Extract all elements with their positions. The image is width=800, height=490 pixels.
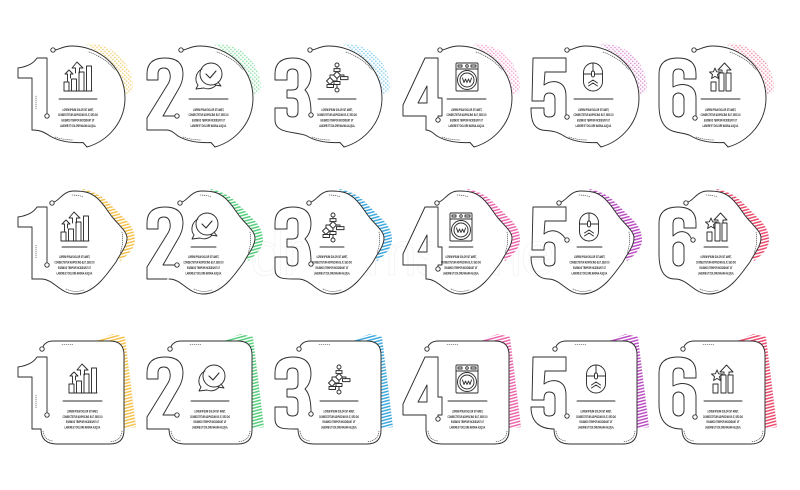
text block: LABORE ET DOLORE MAGNA ALIQUA. — [192, 426, 228, 430]
text block: LABORE ET DOLORE MAGNA ALIQUA. — [64, 426, 100, 430]
text block — [703, 409, 743, 430]
rounded panel outline — [553, 341, 637, 444]
text block: LABORE ET DOLORE MAGNA ALIQUA. — [702, 124, 738, 128]
watermark: dreamstime — [250, 220, 555, 289]
divider — [704, 246, 728, 248]
panel: row 2 step 6 — [659, 189, 769, 294]
text block: LABORE ET DOLORE MAGNA ALIQUA. — [190, 124, 226, 128]
panel: row 3 step 6 — [659, 334, 777, 444]
text block — [448, 409, 488, 430]
text block: LOREM IPSUM DOLOR SIT AMET, — [324, 409, 355, 413]
text block: CONSECTETUR ADIPISCING ELIT, SED DO — [317, 113, 357, 117]
panel: row 1 step 6 — [659, 44, 774, 147]
text block — [190, 409, 230, 430]
icon: growth chart — [69, 364, 97, 393]
text block: EIUSMOD TEMPOR INCIDIDUNT UT — [62, 118, 95, 122]
text block: CONSECTETUR ADIPISCING ELIT, SED DO — [188, 113, 229, 117]
divider — [191, 400, 229, 402]
text block: CONSECTETUR ADIPISCING ELIT, SED DO — [58, 113, 98, 117]
numeral 4 — [403, 58, 442, 130]
text block: CONSECTETUR ADIPISCING ELIT, SED DO — [570, 260, 610, 264]
connector — [32, 278, 41, 280]
hatched accent — [350, 334, 393, 429]
text block: CONSECTETUR ADIPISCING ELIT, SED DO — [703, 415, 743, 419]
hatched accent — [339, 189, 392, 261]
text block: LOREM IPSUM DOLOR SIT AMET, — [451, 108, 482, 112]
text block — [319, 409, 359, 430]
text block: EIUSMOD TEMPOR INCIDIDUNT UT — [451, 420, 484, 424]
rounded panel outline — [297, 341, 381, 444]
text block: CONSECTETUR ADIPISCING ELIT, SED DO — [190, 415, 230, 419]
text block: LOREM IPSUM DOLOR SIT AMET, — [574, 255, 605, 259]
icon: computer mouse — [584, 63, 602, 91]
connector — [167, 428, 169, 430]
text block: LOREM IPSUM DOLOR SIT AMET, — [59, 255, 90, 259]
rounded panel outline — [40, 341, 124, 444]
panel: row 3 step 2 — [147, 334, 264, 444]
divider — [318, 98, 356, 100]
text block — [696, 255, 736, 276]
text block: LABORE ET DOLORE MAGNA ALIQUA. — [705, 426, 741, 430]
text block: CONSECTETUR ADIPISCING ELIT, SED DO — [312, 260, 352, 264]
blob panel outline — [169, 191, 255, 294]
panel: row 3 step 4 — [403, 334, 521, 444]
hatched accent — [210, 189, 263, 261]
text block: LOREM IPSUM DOLOR SIT AMET, — [62, 108, 94, 112]
text block: EIUSMOD TEMPOR INCIDIDUNT UT — [706, 420, 740, 424]
halftone accent — [599, 44, 647, 95]
text block: CONSECTETUR ADIPISCING ELIT, SED DO — [441, 260, 481, 264]
blob panel outline — [41, 191, 127, 294]
text block: LABORE ET DOLORE MAGNA ALIQUA. — [186, 272, 222, 276]
icon: washing machine — [450, 213, 472, 241]
text block: LABORE ET DOLORE MAGNA ALIQUA. — [321, 426, 357, 430]
numeral 4 — [403, 357, 442, 429]
connector — [275, 269, 298, 279]
connector — [659, 404, 682, 429]
speech panel outline — [178, 46, 253, 147]
divider — [574, 98, 613, 100]
text block: CONSECTETUR ADIPISCING ELIT, SED DO — [696, 260, 736, 264]
text block — [441, 255, 481, 276]
panel: row 1 step 2 — [147, 44, 261, 147]
panel: row 2 step 4 — [403, 189, 520, 294]
text block: LABORE ET DOLORE MAGNA ALIQUA. — [314, 272, 350, 276]
blob panel outline — [426, 191, 512, 294]
rounded panel outline — [681, 341, 765, 444]
text block: EIUSMOD TEMPOR INCIDIDUNT UT — [444, 266, 478, 270]
connector — [32, 428, 41, 430]
text block: LABORE ET DOLORE MAGNA ALIQUA. — [698, 272, 734, 276]
speech panel outline — [564, 46, 639, 147]
divider — [577, 400, 615, 402]
halftone accent — [726, 44, 774, 95]
icon: washing machine — [456, 365, 478, 393]
panel: row 1 step 3 — [275, 44, 390, 147]
text block — [312, 255, 352, 276]
icon: star and bars — [712, 365, 733, 393]
text block: EIUSMOD TEMPOR INCIDIDUNT UT — [58, 266, 91, 270]
text block: LABORE ET DOLORE MAGNA ALIQUA. — [60, 124, 96, 128]
text block: LABORE ET DOLORE MAGNA ALIQUA. — [319, 124, 355, 128]
text block: EIUSMOD TEMPOR INCIDIDUNT UT — [187, 266, 220, 270]
text block: EIUSMOD TEMPOR INCIDIDUNT UT — [700, 266, 733, 270]
connector — [275, 120, 307, 136]
numeral 5 — [531, 207, 569, 266]
text block: EIUSMOD TEMPOR INCIDIDUNT UT — [450, 118, 483, 122]
text block: LOREM IPSUM DOLOR SIT AMET, — [452, 409, 483, 413]
text block: LOREM IPSUM DOLOR SIT AMET, — [708, 409, 739, 413]
rounded panel outline — [425, 341, 509, 444]
connector — [531, 108, 564, 136]
text block: CONSECTETUR ADIPISCING ELIT, SED DO — [184, 260, 224, 264]
text block: LABORE ET DOLORE MAGNA ALIQUA. — [443, 272, 479, 276]
panel: row 2 step 2 — [147, 189, 263, 294]
icon: washing machine — [456, 63, 478, 91]
text block: EIUSMOD TEMPOR INCIDIDUNT UT — [194, 420, 227, 424]
panel: row 1 step 5 — [531, 44, 647, 147]
text block: LOREM IPSUM DOLOR SIT AMET, — [578, 108, 609, 112]
text block: CONSECTETUR ADIPISCING ELIT, SED DO — [574, 113, 614, 117]
text block: EIUSMOD TEMPOR INCIDIDUNT UT — [580, 420, 613, 424]
text block: EIUSMOD TEMPOR INCIDIDUNT UT — [316, 266, 349, 270]
speech panel outline — [691, 46, 766, 147]
numeral 3 — [275, 357, 313, 419]
text block: LABORE ET DOLORE MAGNA ALIQUA. — [576, 124, 612, 128]
text block: LOREM IPSUM DOLOR SIT AMET, — [322, 108, 353, 112]
icon: chat check — [192, 213, 218, 239]
panel: row 2 step 3 — [275, 189, 392, 294]
hatched accent — [478, 334, 521, 429]
divider — [59, 98, 97, 100]
numeral 3 — [275, 58, 313, 120]
text block: LABORE ET DOLORE MAGNA ALIQUA. — [572, 272, 608, 276]
halftone accent — [472, 44, 520, 95]
speech panel outline — [50, 46, 125, 147]
divider — [449, 246, 473, 248]
text block: EIUSMOD TEMPOR INCIDIDUNT UT — [66, 420, 99, 424]
icon: flow chart — [326, 63, 348, 92]
numeral 4 — [403, 207, 442, 279]
icon: flow chart — [328, 365, 350, 394]
panel: row 3 step 1 — [18, 334, 136, 444]
panel: row 2 step 1 — [18, 189, 135, 294]
divider — [577, 246, 602, 248]
halftone accent — [342, 44, 390, 95]
text block: LABORE ET DOLORE MAGNA ALIQUA. — [448, 124, 484, 128]
text block: CONSECTETUR ADIPISCING ELIT, SED DO — [446, 113, 487, 117]
text block: CONSECTETUR ADIPISCING ELIT, SED DO — [576, 415, 616, 419]
divider — [704, 400, 742, 402]
divider — [447, 98, 486, 100]
text block: EIUSMOD TEMPOR INCIDIDUNT UT — [573, 266, 606, 270]
panel: row 3 step 3 — [275, 334, 393, 444]
text block — [188, 108, 229, 128]
connector — [426, 130, 437, 136]
numeral 3 — [275, 207, 313, 269]
speech panel outline — [437, 46, 512, 147]
text block: CONSECTETUR ADIPISCING ELIT, SED DO — [319, 415, 359, 419]
numeral 6 — [659, 207, 696, 266]
text block: LOREM IPSUM DOLOR SIT AMET, — [316, 255, 348, 259]
text block — [446, 108, 487, 128]
numeral 2 — [147, 357, 183, 429]
text block: LOREM IPSUM DOLOR SIT AMET, — [193, 108, 224, 112]
divider — [320, 400, 358, 402]
icon: growth chart — [64, 62, 92, 91]
text block: LOREM IPSUM DOLOR SIT AMET, — [194, 409, 226, 413]
text block — [317, 108, 357, 128]
icon: computer mouse — [586, 365, 606, 393]
halftone accent — [85, 44, 133, 95]
connector — [275, 419, 298, 429]
text block: LABORE ET DOLORE MAGNA ALIQUA. — [450, 426, 486, 430]
numeral 2 — [147, 207, 183, 279]
text block: LOREM IPSUM DOLOR SIT AMET, — [580, 409, 612, 413]
panel: row 1 step 1 — [18, 44, 133, 147]
text block: LOREM IPSUM DOLOR SIT AMET, — [188, 255, 219, 259]
text block — [574, 108, 614, 128]
divider — [701, 98, 740, 100]
text block: CONSECTETUR ADIPISCING ELIT, SED DO — [448, 415, 488, 419]
hatched accent — [93, 334, 136, 429]
text block: LOREM IPSUM DOLOR SIT AMET, — [705, 108, 736, 112]
divider — [191, 246, 216, 248]
text block: CONSECTETUR ADIPISCING ELIT, SED DO — [62, 415, 103, 419]
connector — [167, 130, 178, 136]
connector — [659, 254, 675, 279]
numeral 1 — [18, 207, 49, 279]
hatched accent — [716, 189, 769, 261]
text block — [58, 108, 98, 128]
hatched accent — [82, 189, 135, 261]
text block — [576, 409, 616, 430]
speech panel outline — [307, 46, 382, 147]
numeral 1 — [18, 357, 49, 429]
divider — [62, 246, 87, 248]
hatched accent — [734, 334, 777, 429]
blob panel outline — [548, 191, 634, 294]
numeral 5 — [531, 58, 569, 119]
text block: LOREM IPSUM DOLOR SIT AMET, — [67, 409, 98, 413]
text block: LABORE ET DOLORE MAGNA ALIQUA. — [578, 426, 614, 430]
numeral 6 — [659, 357, 697, 419]
text block: EIUSMOD TEMPOR INCIDIDUNT UT — [577, 118, 610, 122]
icon: growth chart — [61, 212, 89, 241]
rounded panel outline — [168, 341, 252, 444]
text block: LABORE ET DOLORE MAGNA ALIQUA. — [56, 272, 92, 276]
text block: LOREM IPSUM DOLOR SIT AMET, — [700, 255, 732, 259]
panel: row 3 step 5 — [531, 334, 649, 444]
infographic canvas — [18, 44, 777, 444]
numeral 1 — [18, 58, 49, 130]
icon: star and bars — [710, 63, 731, 91]
text block: EIUSMOD TEMPOR INCIDIDUNT UT — [704, 118, 737, 122]
text block — [700, 108, 741, 128]
connector — [531, 407, 554, 429]
numeral 5 — [531, 357, 569, 418]
connector — [32, 130, 50, 136]
icon: flow chart — [322, 213, 344, 242]
halftone accent — [213, 44, 261, 95]
blob panel outline — [298, 191, 384, 294]
text block: CONSECTETUR ADIPISCING ELIT, SED DO — [54, 260, 95, 264]
connector — [659, 105, 691, 136]
text block — [54, 255, 95, 276]
text block: CONSECTETUR ADIPISCING ELIT, SED DO — [700, 113, 741, 117]
divider — [320, 246, 344, 248]
numeral 6 — [659, 58, 697, 120]
text block — [184, 255, 224, 276]
text block — [62, 409, 103, 430]
text block: EIUSMOD TEMPOR INCIDIDUNT UT — [320, 118, 354, 122]
text block: LOREM IPSUM DOLOR SIT AMET, — [446, 255, 477, 259]
hatched accent — [221, 334, 264, 429]
icon: chat check — [199, 365, 225, 391]
icon: star and bars — [706, 213, 727, 241]
divider — [189, 98, 228, 100]
icon: chat check — [196, 63, 222, 89]
panel: row 1 step 4 — [403, 44, 520, 147]
connector — [531, 257, 548, 279]
blob panel outline — [675, 191, 761, 294]
text block — [570, 255, 610, 276]
panel: row 2 step 5 — [531, 189, 642, 294]
hatched accent — [467, 189, 520, 261]
divider — [448, 400, 487, 402]
divider — [63, 400, 102, 402]
icon: computer mouse — [580, 213, 598, 241]
text block: EIUSMOD TEMPOR INCIDIDUNT UT — [192, 118, 225, 122]
text block: EIUSMOD TEMPOR INCIDIDUNT UT — [322, 420, 356, 424]
hatched accent — [589, 189, 642, 261]
numeral 2 — [147, 58, 183, 130]
hatched accent — [606, 334, 649, 429]
